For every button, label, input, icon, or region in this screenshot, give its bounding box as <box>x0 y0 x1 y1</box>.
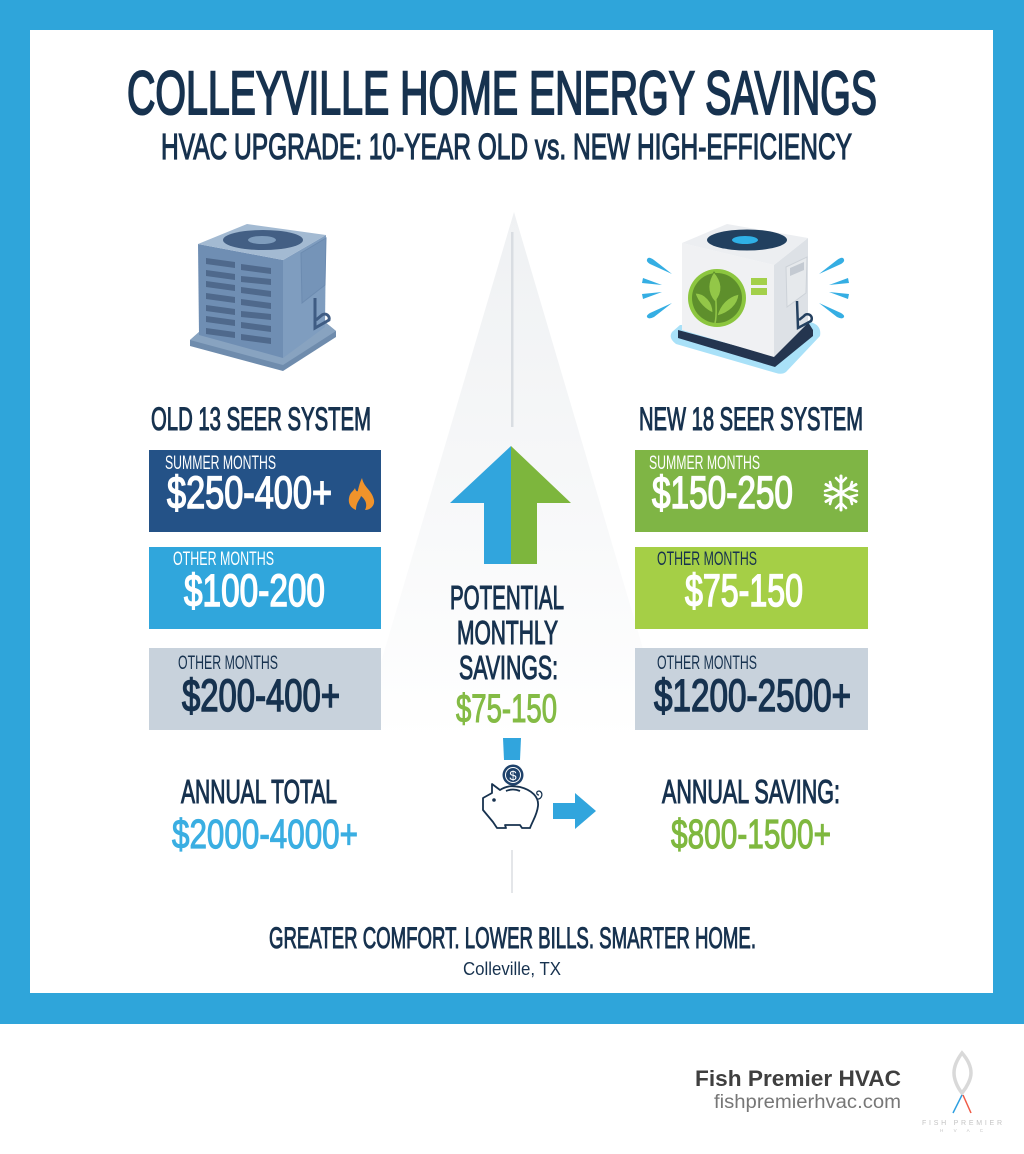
logo: Fish Premier HVAC: FISH PREMIER <box>922 1120 1002 1127</box>
logo: Fish Premier HVAC <box>922 1053 1002 1133</box>
heading: new system: NEW 18 SEER SYSTEM <box>639 401 863 437</box>
annual saving: $800-1500+ <box>671 811 831 857</box>
card: new summer months: $150-250 <box>652 467 793 518</box>
white panel <box>30 30 993 993</box>
arrow: up savings arrow <box>450 446 571 564</box>
heading: old system: OLD 13 SEER SYSTEM <box>151 401 371 437</box>
arrow: right arrow <box>553 793 596 829</box>
card: new other months <box>635 547 868 629</box>
footer website: fishpremierhvac.com <box>714 1092 901 1113</box>
card: old other months: OTHER MONTHS <box>173 549 274 570</box>
potential monthly savings: MONTHLY <box>457 614 558 651</box>
card: old other months: $100-200 <box>184 565 325 616</box>
card: new other months cost <box>635 648 868 730</box>
location: Colleville, TX <box>463 959 561 979</box>
card: new other months cost: OTHER MONTHS <box>657 653 757 674</box>
card: old summer months: $250-400+ <box>167 467 332 518</box>
annual total <box>172 773 358 857</box>
annual total: ANNUAL TOTAL <box>181 773 337 810</box>
background pyramid <box>358 212 670 740</box>
annual saving <box>662 773 840 857</box>
potential monthly savings: SAVINGS: <box>459 649 558 686</box>
card: old other months <box>149 547 381 629</box>
footer brand name: Fish Premier HVAC <box>695 1066 901 1091</box>
annual saving: ANNUAL SAVING: <box>662 773 840 810</box>
card: new other months cost: $1200-2500+ <box>654 670 851 721</box>
card: new other months: OTHER MONTHS <box>657 549 757 570</box>
card: old summer months <box>149 450 381 532</box>
potential monthly savings: $75-150 <box>456 687 557 731</box>
marker: small blue drop <box>503 738 521 760</box>
icon: old AC unit <box>190 224 336 371</box>
card: new summer months: SUMMER MONTHS <box>649 453 760 474</box>
icon: flame <box>349 478 374 510</box>
potential monthly savings <box>450 579 564 731</box>
card: old summer months: SUMMER MONTHS <box>165 453 276 474</box>
icon: new high-efficiency AC unit <box>642 224 849 374</box>
card: old other months cost: OTHER MONTHS <box>178 653 278 674</box>
annual total: $2000-4000+ <box>172 811 358 857</box>
potential monthly savings: POTENTIAL <box>450 579 564 616</box>
icon: piggy bank: $ <box>509 768 517 783</box>
icon: piggy bank <box>483 764 542 828</box>
card: new other months: $75-150 <box>685 565 803 616</box>
panel: old system <box>149 401 381 857</box>
card: new summer months <box>635 450 868 532</box>
card: old other months cost: $200-400+ <box>182 670 340 721</box>
card: old other months cost <box>149 648 381 730</box>
logo: Fish Premier HVAC: H V A C <box>940 1128 984 1133</box>
center line <box>511 232 514 893</box>
panel: new system <box>635 401 868 857</box>
icon: snowflake <box>825 476 857 510</box>
